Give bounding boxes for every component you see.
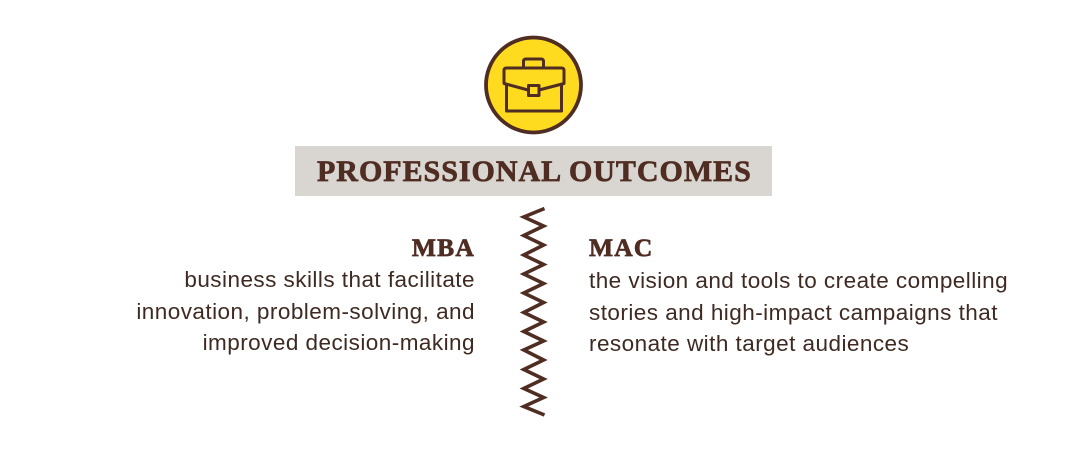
text: MAC outcomes: resonate with target audiences [589,331,909,356]
panel: MAC [589,233,1008,356]
text: MBA outcomes: innovation, problem-solving, and [136,298,475,324]
heading banner [295,146,772,196]
text: MAC outcomes: the vision and tools to create compelling [589,268,1008,293]
heading: MAC: MAC [589,233,654,262]
panel: MBA [136,233,475,355]
icon: briefcase in yellow circle [484,36,583,134]
text: MAC outcomes: stories and high-impact campaigns that [589,300,998,324]
text: MBA outcomes [136,267,475,355]
text: MBA outcomes: business skills that facilitate [184,267,475,292]
text: MAC outcomes [589,268,1008,356]
zigzag divider [519,206,548,417]
heading: MBA: MBA [412,233,475,262]
text: MBA outcomes: improved decision-making [203,330,475,355]
heading: professional outcomes: PROFESSIONAL OUTCOMES [317,155,752,188]
